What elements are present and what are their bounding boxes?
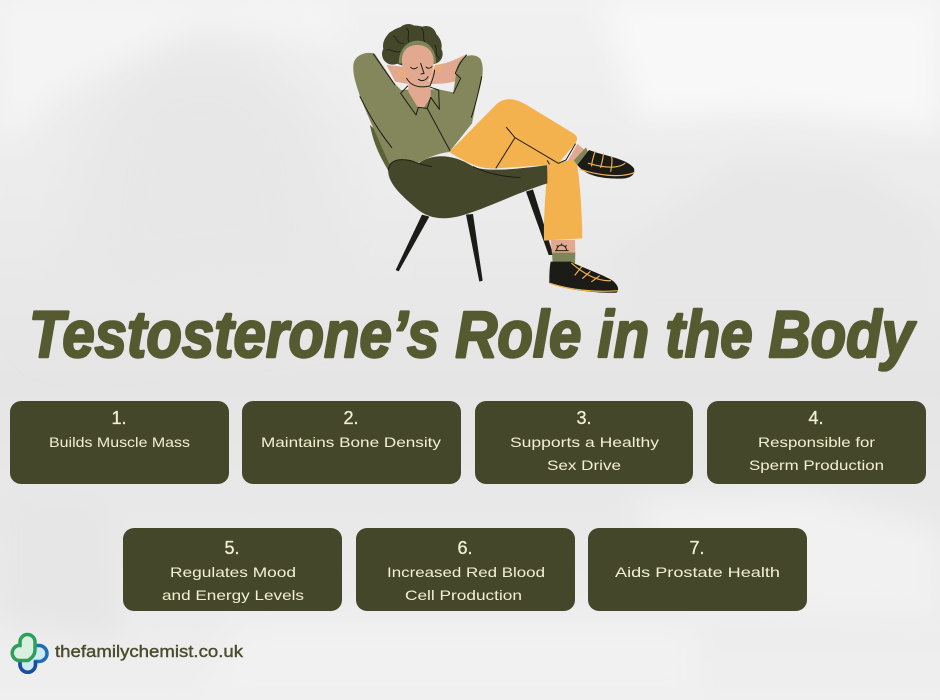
lower leg trousers	[544, 160, 582, 241]
forearms skin	[387, 54, 466, 84]
ankle tattoo	[555, 243, 569, 251]
card 7: aids prostate health: Aids Prostate Health	[615, 564, 780, 580]
card 5: regulates mood and energy levels: Regulates Mood	[170, 564, 296, 580]
trouser lines	[496, 127, 575, 168]
top foot skin and sock	[567, 144, 585, 164]
neck	[408, 78, 431, 108]
card 6: increased red blood cell production	[356, 528, 575, 611]
card 5: regulates mood and energy levels: 5.	[224, 538, 240, 558]
card 1: builds muscle mass: Builds Muscle Mass	[49, 434, 190, 450]
top shoe laces	[580, 152, 634, 176]
lower shoe	[549, 262, 618, 293]
card 2: maintains bone density: 2.	[343, 408, 359, 428]
website address: thefamilychemist.co.uk	[55, 642, 244, 661]
card 4: responsible for sperm production: Responsible for	[758, 434, 875, 450]
card 7: aids prostate health: 7.	[689, 538, 705, 558]
chair legs	[396, 189, 553, 282]
facial features	[407, 63, 435, 87]
card 5: regulates mood and energy levels: and Energy Levels	[162, 587, 304, 603]
shirt	[353, 53, 483, 164]
card 4: responsible for sperm production	[707, 401, 926, 484]
card 1: builds muscle mass: 1.	[111, 408, 127, 428]
face	[402, 45, 434, 87]
card 3: supports a healthy sex drive	[475, 401, 693, 484]
lower ankle	[551, 240, 575, 254]
illustration: man relaxing in chair	[353, 24, 634, 293]
chair seat lines	[388, 160, 520, 178]
chair back	[370, 125, 407, 171]
card 2: maintains bone density: Maintains Bone Density	[261, 434, 441, 450]
card 5: regulates mood and energy levels	[123, 528, 342, 611]
hair	[382, 24, 443, 67]
lower sock	[552, 253, 575, 263]
card 6: increased red blood cell production: Cell Production	[405, 587, 522, 603]
card 3: supports a healthy sex drive: 3.	[576, 408, 592, 428]
card 2: maintains bone density	[242, 401, 461, 484]
shirt lines	[360, 54, 482, 151]
card 6: increased red blood cell production: 6.	[457, 538, 473, 558]
earrings	[399, 66, 441, 76]
logo: cross-shaped pharmacy mark	[12, 635, 47, 672]
lower shoe laces	[550, 263, 617, 291]
hair strands	[387, 28, 439, 58]
card 7: aids prostate health	[588, 528, 807, 611]
upper leg trousers	[449, 99, 577, 168]
card 4: responsible for sperm production: Sperm Production	[749, 457, 884, 473]
card 3: supports a healthy sex drive: Supports a Healthy	[510, 434, 659, 450]
card 4: responsible for sperm production: 4.	[808, 408, 824, 428]
card 3: supports a healthy sex drive: Sex Drive	[547, 457, 621, 473]
card 6: increased red blood cell production: Increased Red Blood	[387, 564, 545, 580]
top shoe	[577, 150, 634, 179]
hair band	[399, 41, 436, 63]
chair seat	[388, 156, 547, 218]
card 1: builds muscle mass	[10, 401, 229, 484]
